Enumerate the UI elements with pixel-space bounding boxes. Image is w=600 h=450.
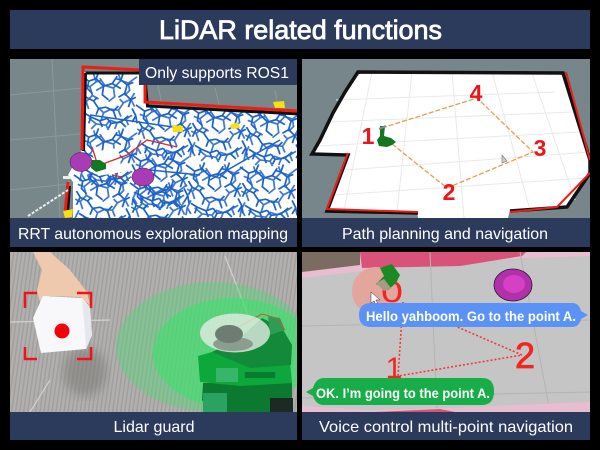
waypoint numbers: 3	[534, 135, 546, 161]
green radar rings	[116, 282, 310, 412]
speech bubble: green: OK. I’m going to the point A.	[316, 385, 490, 401]
badge: Only supports ROS1	[139, 59, 297, 85]
title banner	[10, 10, 590, 49]
photo: floor with robot	[10, 252, 313, 412]
caption	[10, 412, 297, 440]
caption	[10, 218, 297, 247]
waypoint numbers: 4	[470, 80, 483, 106]
caption: Path planning and navigation	[342, 226, 548, 243]
robot	[376, 264, 400, 290]
speech bubble: green	[306, 378, 494, 405]
map: RRT exploration scene	[10, 59, 297, 218]
map boundary	[68, 73, 298, 214]
purple goal	[494, 269, 532, 301]
cursor	[502, 155, 507, 163]
planned path	[92, 140, 177, 177]
white cube	[33, 296, 92, 353]
title banner: LiDAR related functions	[159, 15, 442, 45]
waypoint numbers: 1	[362, 123, 375, 149]
yellow markers	[63, 101, 285, 218]
waypoint numbers	[362, 80, 546, 205]
robot marker	[91, 160, 106, 172]
purple waypoints	[70, 152, 154, 186]
cursor	[371, 292, 380, 305]
numbers	[382, 282, 534, 378]
panel: RRT autonomous exploration mapping	[10, 59, 301, 247]
panel: Lidar guard	[10, 252, 313, 440]
dashed route	[382, 98, 533, 188]
lidar disc	[200, 314, 270, 352]
red wall segments	[327, 72, 590, 212]
speech bubble: blue: Hello yahboom. Go to the point A.	[366, 308, 576, 324]
caption: RRT autonomous exploration mapping	[18, 226, 288, 243]
black walls	[312, 72, 590, 213]
caption: Lidar guard	[114, 419, 194, 436]
robot	[377, 126, 396, 147]
numbers: 0	[381, 276, 403, 309]
route	[398, 302, 522, 376]
map: floor plan	[302, 59, 590, 218]
hand	[33, 252, 90, 305]
blue exploration tree	[74, 74, 297, 218]
speech bubble: blue	[359, 303, 588, 327]
caption	[302, 218, 590, 247]
waypoint numbers: 2	[443, 179, 455, 205]
map: costmap scene	[302, 252, 590, 412]
robot car	[198, 314, 293, 412]
target brackets	[25, 293, 91, 359]
numbers: 2	[515, 335, 535, 376]
panel: Path planning and navigation	[302, 59, 590, 247]
numbers: 1	[386, 352, 402, 385]
caption: Voice control multi-point navigation	[319, 419, 573, 436]
caption	[302, 412, 590, 440]
panel: Voice control multi-point navigation	[302, 252, 590, 440]
origin halo	[352, 267, 399, 309]
badge: Only supports ROS1: Only supports ROS1	[145, 65, 289, 82]
